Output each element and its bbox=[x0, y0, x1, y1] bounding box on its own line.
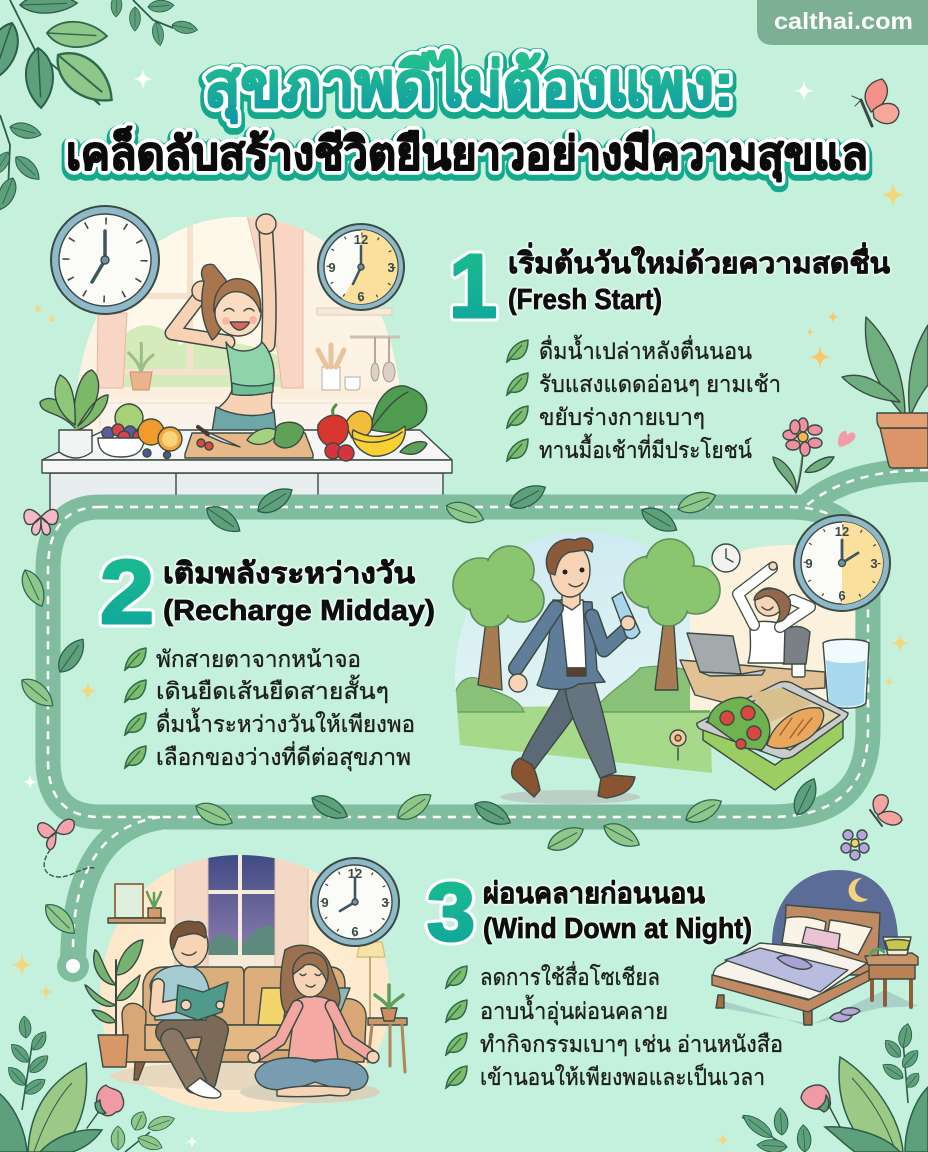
step 2: heading: เติมพลังระหว่างวัน bbox=[163, 558, 415, 590]
bottom-left foliage bbox=[0, 1016, 176, 1152]
step 2: bullet list: เดินยืดเส้นยืดสายสั้นๆ bbox=[156, 675, 389, 704]
sofa bbox=[122, 967, 366, 1080]
step 3: heading: 3 bbox=[427, 867, 475, 958]
kitchen backdrop bbox=[70, 215, 410, 440]
office wall clock bbox=[712, 544, 740, 572]
night sky bbox=[772, 870, 898, 950]
step 3: heading bbox=[427, 867, 752, 958]
desk and laptop bbox=[680, 633, 825, 712]
bottom-left flower bbox=[87, 1085, 124, 1128]
park background bbox=[455, 532, 712, 773]
potted greens bbox=[40, 370, 108, 458]
trees bbox=[453, 539, 720, 690]
step 3: bullet list: เข้านอนให้เพียงพอและเป็นเวลา bbox=[480, 1062, 765, 1090]
title bbox=[66, 49, 868, 185]
countertop bbox=[42, 430, 452, 513]
butterfly right bbox=[870, 795, 902, 826]
flower and heart near road bbox=[773, 418, 855, 493]
room backdrop with window and curtains bbox=[98, 853, 393, 1115]
bed bbox=[712, 905, 880, 1025]
side table and plant bbox=[368, 985, 407, 1072]
winding path road bbox=[48, 470, 928, 982]
illustration: midday park and office bbox=[450, 515, 890, 804]
stretching coworker bbox=[738, 562, 810, 664]
title: เคล็ดลับสร้างชีวิตยืนยาวอย่างมีความสุขแล bbox=[66, 129, 868, 185]
large clock 7:00 bbox=[51, 206, 159, 314]
left plant bbox=[85, 940, 143, 1067]
clock 2:00: 3 bbox=[870, 556, 878, 571]
clock 2:00: 9 bbox=[805, 556, 813, 571]
title: สุขภาพดีไม่ต้องแพง: bbox=[204, 49, 734, 123]
clock 8:00: 3 bbox=[381, 895, 389, 910]
office backdrop bbox=[690, 545, 855, 710]
step 2: bullet list bbox=[124, 646, 415, 771]
step 1: bullet list bbox=[506, 335, 781, 463]
step 3: bullet list: ทำกิจกรรมเบาๆ เช่น อ่านหนังสือ bbox=[480, 1031, 783, 1057]
title: เคล็ดลับสร้างชีวิตยืนยาวอย่างมีความสุขแล bbox=[66, 126, 868, 182]
flower in grass bbox=[670, 730, 686, 760]
step 1: bullet list: รับแสงแดดอ่อนๆ ยามเช้า bbox=[539, 371, 781, 397]
fruit bowl and oranges bbox=[98, 404, 182, 458]
step 1: heading bbox=[449, 237, 890, 337]
clock 2:00 bbox=[794, 515, 890, 611]
small clock 7:00 bbox=[318, 224, 404, 310]
step 1: bullet list: ทานมื้อเช้าที่มีประโยชน์ bbox=[539, 434, 752, 463]
clock 2:00: 6 bbox=[838, 588, 846, 603]
bottom-right flower bbox=[801, 1085, 840, 1127]
step 3: bullet list: อาบน้ำอุ่นผ่อนคลาย bbox=[480, 995, 668, 1025]
step 1: heading: เริ่มต้นวันใหม่ด้วยความสดชื่น bbox=[508, 242, 890, 280]
potted plant right bbox=[842, 317, 928, 468]
step 3: heading: ผ่อนคลายก่อนนอน bbox=[483, 878, 705, 910]
nightstand and tea bbox=[865, 937, 918, 1007]
title: สุขภาพดีไม่ต้องแพง: bbox=[204, 49, 734, 123]
water glass bbox=[823, 639, 869, 708]
window plant bbox=[128, 342, 154, 390]
step 2: heading: 2 bbox=[100, 543, 154, 643]
step 3: bullet list bbox=[445, 961, 783, 1090]
decorative leaves along the road bbox=[16, 479, 822, 940]
clock 8:00 bbox=[311, 858, 399, 946]
illustration: morning kitchen bbox=[40, 206, 452, 513]
step 2: bullet list: เลือกของว่างที่ดีต่อสุขภาพ bbox=[156, 741, 411, 771]
small clock 7:00: 6 bbox=[357, 289, 365, 304]
step 3: heading: (Wind Down at Night) bbox=[483, 913, 752, 945]
man reading a book bbox=[150, 921, 228, 1098]
step 3: heading: 3 bbox=[427, 867, 475, 958]
step 2: heading: 2 bbox=[100, 543, 154, 643]
illustration: bed at night bbox=[712, 870, 918, 1026]
floor lamp bbox=[357, 942, 385, 1020]
floor shadow under bed and nightstand bbox=[720, 990, 918, 1026]
walking man bbox=[500, 538, 640, 804]
illustration: evening living room bbox=[85, 853, 407, 1115]
title: เคล็ดลับสร้างชีวิตยืนยาวอย่างมีความสุขแล bbox=[66, 126, 868, 182]
peppers, strawberries and bananas bbox=[318, 386, 427, 461]
website badge: calthai.com bbox=[774, 8, 913, 34]
butterfly top right bbox=[852, 79, 899, 126]
clock 2:00: 12 bbox=[835, 524, 849, 539]
step 1: bullet list: ขยับร่างกายเบาๆ bbox=[539, 404, 705, 430]
small clock 7:00: 9 bbox=[328, 260, 336, 275]
cutting board bbox=[185, 422, 313, 458]
shelf and utensils bbox=[317, 308, 400, 390]
clock 8:00: 12 bbox=[348, 866, 362, 881]
small purple flower bbox=[841, 830, 869, 860]
step 1: bullet list: ดื่มน้ำเปล่าหลังตื่นนอน bbox=[539, 335, 752, 364]
small clock 7:00: 3 bbox=[387, 260, 395, 275]
woman meditating bbox=[240, 945, 380, 1103]
step 2: heading bbox=[100, 543, 435, 643]
website badge bbox=[757, 0, 928, 45]
shelf with frame and small plant bbox=[108, 884, 165, 923]
butterfly left lower with dotted trail bbox=[38, 819, 94, 877]
step 1: heading: (Fresh Start) bbox=[508, 284, 662, 316]
step 2: bullet list: ดื่มน้ำระหว่างวันให้เพียงพอ bbox=[156, 708, 415, 737]
clock 8:00: 9 bbox=[321, 895, 329, 910]
title: สุขภาพดีไม่ต้องแพง: bbox=[204, 52, 734, 126]
moon bbox=[849, 878, 868, 902]
butterfly left of road bbox=[24, 509, 58, 535]
step 1: heading: 1 bbox=[449, 237, 497, 337]
lunch box bbox=[697, 682, 848, 790]
woman stretching bbox=[172, 214, 276, 432]
top-left foliage bbox=[0, 0, 199, 212]
floor shadow bbox=[110, 1062, 370, 1090]
clock 8:00: 6 bbox=[351, 924, 359, 939]
step 2: bullet list: พักสายตาจากหน้าจอ bbox=[156, 646, 361, 672]
step 3: bullet list: ลดการใช้สื่อโซเชียล bbox=[480, 961, 660, 990]
bottom-right foliage bbox=[739, 1022, 928, 1152]
small clock 7:00: 12 bbox=[354, 232, 368, 247]
step 2: heading: (Recharge Midday) bbox=[163, 595, 435, 627]
step 1: heading: 1 bbox=[449, 237, 497, 337]
